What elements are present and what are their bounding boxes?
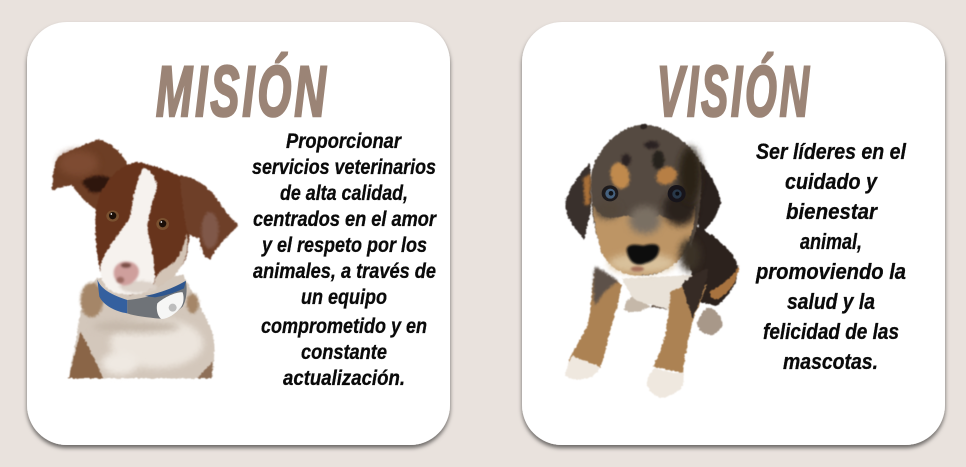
- eyes: [106, 210, 169, 230]
- text: misión: servicios veterinarios: [252, 156, 436, 179]
- heading: misión: MISIÓN: [156, 52, 329, 132]
- text: visión: [755, 139, 907, 374]
- eyes: [602, 185, 686, 202]
- text: misión: actualización.: [283, 367, 405, 390]
- panel: misión: [27, 22, 450, 445]
- text: visión: felicidad de las: [763, 319, 899, 344]
- text: misión: [252, 130, 438, 390]
- text: misión: animales, a través de: [253, 260, 436, 283]
- text: misión: constante: [301, 341, 387, 364]
- heading: visión: VISIÓN: [657, 53, 812, 132]
- text: visión: animal,: [800, 229, 862, 254]
- text: misión: Proporcionar: [286, 130, 403, 153]
- text: misión: de alta calidad,: [280, 182, 408, 205]
- panel: visión: [522, 22, 945, 445]
- text: visión: promoviendo la: [755, 259, 906, 284]
- text: misión: y el respeto por los: [261, 234, 427, 257]
- text: visión: cuidado y: [785, 169, 879, 194]
- nose: [627, 244, 659, 272]
- text: misión: un equipo: [301, 286, 387, 309]
- text: visión: mascotas.: [783, 349, 878, 374]
- text: misión: comprometido y en: [261, 315, 427, 338]
- nose: [114, 261, 139, 285]
- text: misión: centrados en el amor: [253, 208, 438, 231]
- collar: [97, 279, 187, 319]
- text: visión: bienestar: [786, 199, 878, 224]
- text: visión: salud y la: [787, 289, 875, 314]
- text: visión: Ser líderes en el: [756, 139, 907, 164]
- icon: tricolor puppy sitting: [565, 124, 739, 398]
- icon: brown and white puppy with collar: [52, 139, 239, 378]
